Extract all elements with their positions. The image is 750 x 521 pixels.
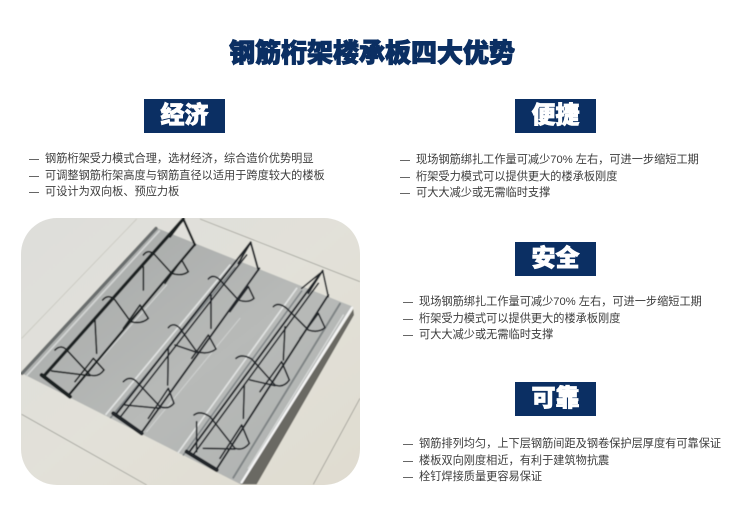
floor seams xyxy=(22,219,360,485)
text list: 可靠: 钢筋排列均匀，上下层钢筋间距及钢卷保护层厚度有可靠保证 xyxy=(419,438,721,450)
text list: 便捷: 可大大减少或无需临时支撑 xyxy=(416,187,550,199)
text list: 便捷: 桁架受力模式可以提供更大的楼承板刚度 xyxy=(416,170,617,182)
badge: 安全: 安全 xyxy=(532,245,580,272)
plate ribs xyxy=(22,228,352,482)
badge: 可靠: 可靠 xyxy=(532,385,580,412)
badge: 便捷: 便捷 xyxy=(532,102,580,129)
text list: 可靠 xyxy=(403,437,721,483)
truss 3 xyxy=(187,271,328,470)
shadow under plate xyxy=(241,309,354,484)
text list: 经济: 可设计为双向板、预应力板 xyxy=(45,186,179,198)
text list: 便捷 xyxy=(400,153,699,199)
badge: 经济: 经济 xyxy=(160,102,208,129)
text list: 可靠: 楼板双向刚度相近，有利于建筑物抗震 xyxy=(419,454,609,466)
text list: 安全 xyxy=(403,295,702,341)
truss 2 xyxy=(113,242,259,433)
truss 1 xyxy=(42,219,195,397)
photo: steel truss deck panel xyxy=(21,218,360,485)
badge: 便捷 xyxy=(515,99,596,133)
text list: 经济 xyxy=(29,152,325,198)
title: 钢筋桁架楼承板四大优势 xyxy=(229,38,515,68)
text list: 安全: 可大大减少或无需临时支撑 xyxy=(419,329,553,341)
text list: 安全: 现场钢筋绑扎工作量可减少70% 左右，可进一步缩短工期 xyxy=(419,296,702,308)
badge: 可靠 xyxy=(515,382,596,416)
text list: 安全: 桁架受力模式可以提供更大的楼承板刚度 xyxy=(419,312,620,324)
text list: 经济: 可调整钢筋桁架高度与钢筋直径以适用于跨度较大的楼板 xyxy=(45,170,325,182)
text list: 便捷: 现场钢筋绑扎工作量可减少70% 左右，可进一步缩短工期 xyxy=(416,154,699,166)
text list: 经济: 钢筋桁架受力模式合理，选材经济，综合造价优势明显 xyxy=(45,153,314,165)
text list: 可靠: 栓钉焊接质量更容易保证 xyxy=(419,471,542,483)
deck plate xyxy=(22,228,353,484)
badge: 经济 xyxy=(144,99,225,133)
badge: 安全 xyxy=(515,242,596,276)
